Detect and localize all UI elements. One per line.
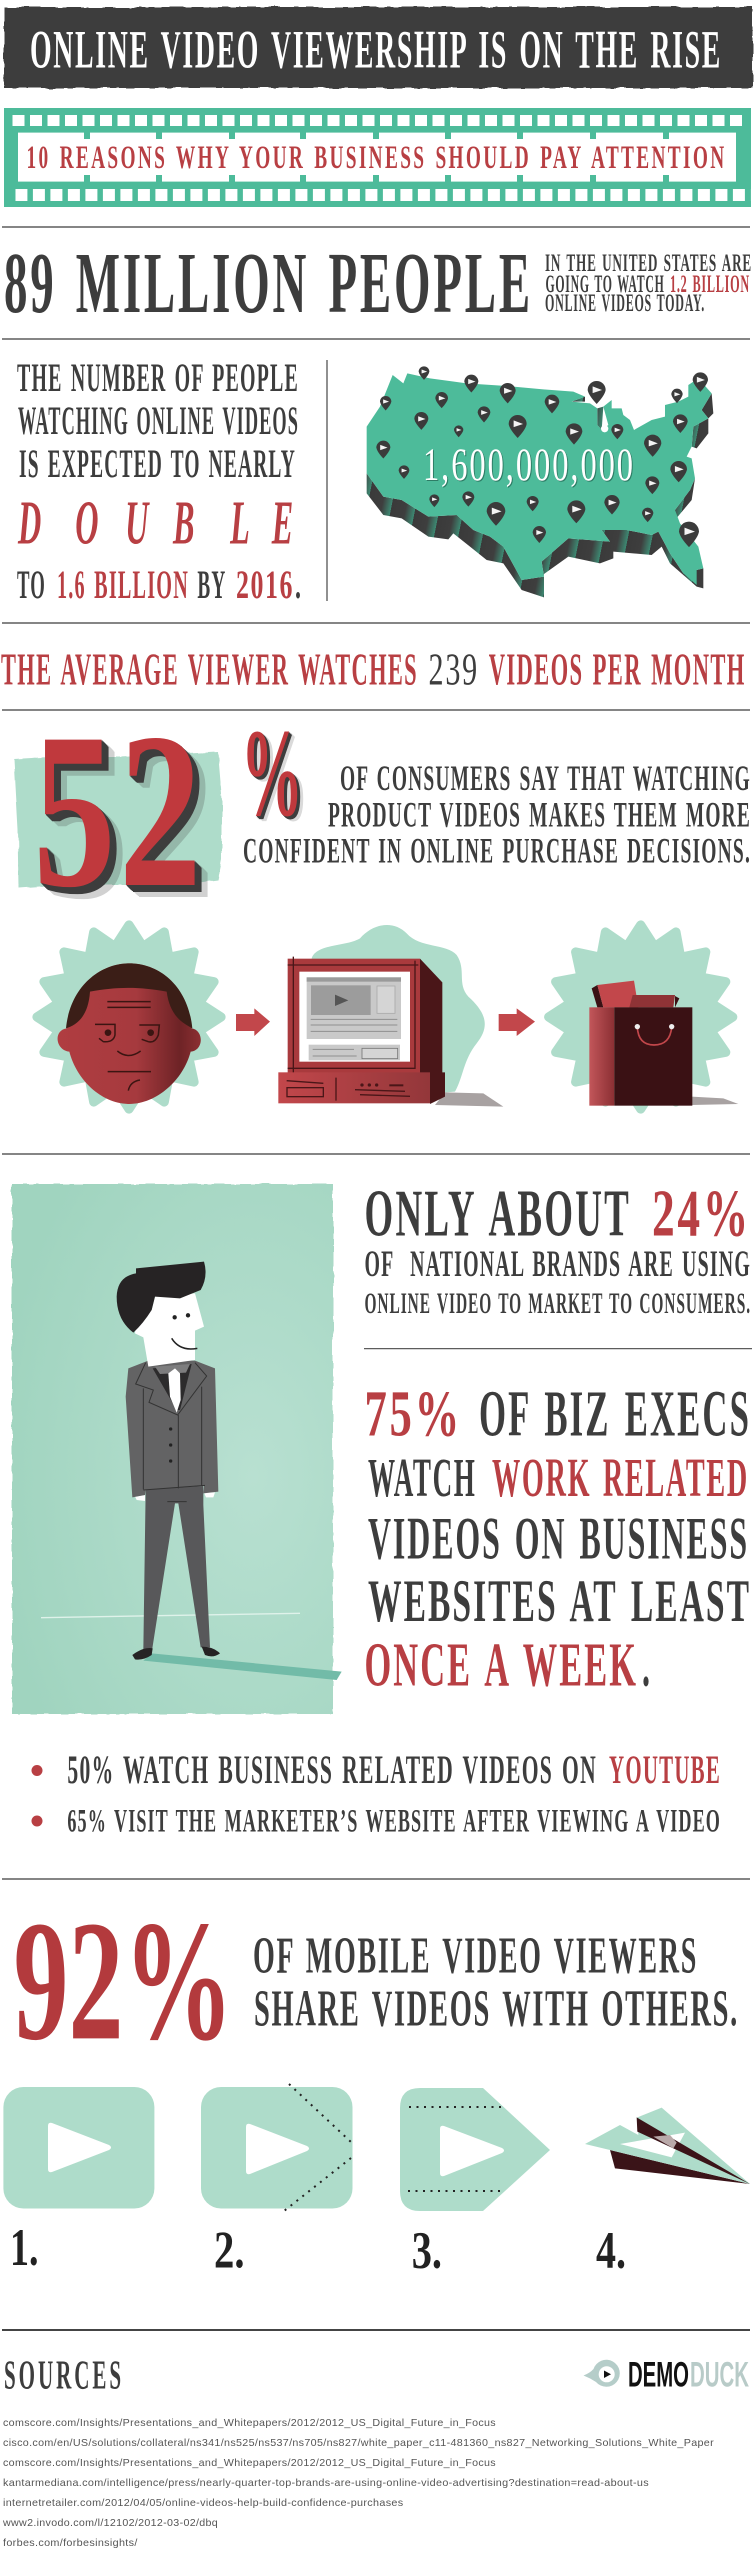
stat: 75 percent of biz execs: WATCH	[368, 1447, 476, 1508]
logo: DemoDuck	[584, 2356, 749, 2395]
source list: comscore.com/Insights/Presentations_and_Whitepapers/2012/2012_US_Digital_Future_in_Focus	[3, 2457, 496, 2469]
source list: internetretailer.com/2012/04/05/online-videos-help-build-confidence-purchases	[3, 2497, 404, 2509]
step 2: play button with fold lines: 2.	[214, 2222, 244, 2280]
arrow: computer to shopping bag	[499, 1008, 535, 1036]
panel: businessman illustration	[12, 1184, 342, 1714]
map figure label: 1,600,000,000	[423, 439, 635, 491]
stat: average viewer watches 239 videos: 239	[428, 644, 479, 694]
map of the USA with video pins	[367, 366, 713, 597]
stat: 92 percent of mobile viewers	[14, 1886, 739, 2076]
film strip subtitle banner	[4, 108, 751, 207]
source list: cisco.com/en/US/solutions/collateral/ns341/ns525/ns537/ns705/ns827/white_paper_c11-481360_ns827_Networking_Solutions_White_Paper	[3, 2437, 714, 2449]
icon: shopping bag	[549, 925, 738, 1109]
stat: 24 percent of national brands	[364, 1177, 751, 1320]
stat: 75 percent of biz execs: 75%	[364, 1377, 462, 1450]
text: IS EXPECTED TO NEARLY	[19, 441, 296, 486]
map top face	[367, 373, 712, 585]
source list: kantarmediana.com/intelligence/press/nearly-quarter-top-brands-are-using-online-video-advertising?destination=read-about-us	[3, 2477, 649, 2489]
step 4: paper airplane: 4.	[596, 2222, 626, 2280]
text block: viewers expected to double: 1.6 BILLION	[57, 562, 189, 607]
stat: 75 percent of biz execs	[364, 1377, 751, 1700]
mint backdrop behind 52	[14, 752, 222, 888]
icon: customer face	[37, 925, 221, 1109]
text block: viewers expected to double: THE NUMBER OF PEOPLE	[17, 355, 299, 400]
step 1: play button: 1.	[10, 2219, 38, 2277]
stat: 52 percent	[33, 688, 751, 934]
sources heading: SOURCES	[4, 2352, 124, 2398]
bullet list	[32, 1747, 721, 1840]
source list	[2, 2417, 714, 2549]
text block: viewers expected to double: TO	[17, 562, 46, 607]
icon: computer showing video page	[278, 925, 503, 1107]
text: WATCHING ONLINE VIDEOS	[18, 398, 299, 443]
text block: viewers expected to double	[17, 355, 301, 607]
arrow: face to computer	[236, 1008, 270, 1036]
text block: viewers expected to double: 2016	[236, 562, 294, 607]
stat: 75 percent of biz execs: .	[642, 1632, 650, 1700]
step 3: folded play button: 3.	[412, 2222, 442, 2280]
source list: www2.invodo.com/l/12102/2012-03-02/dbq	[2, 2517, 218, 2529]
text block: viewers expected to double: .	[295, 562, 301, 607]
map extruded side	[367, 473, 703, 597]
text block: viewers expected to double: DOUBLE	[17, 488, 293, 557]
text block: viewers expected to double: BY	[197, 562, 226, 607]
stat: 52 percent: %	[241, 705, 303, 843]
step 4: paper airplane	[585, 2108, 750, 2280]
step 2: play button with fold lines	[201, 2084, 352, 2280]
logo: DemoDuck: DEMO	[628, 2356, 689, 2395]
step 3: folded play button	[400, 2088, 550, 2280]
source list: comscore.com/Insights/Presentations_and_Whitepapers/2012/2012_US_Digital_Future_in_Focus	[3, 2417, 496, 2429]
stat: 92 percent of mobile viewers: 92%	[14, 1886, 234, 2076]
step 1: play button	[3, 2087, 154, 2277]
stat: 52 percent: 52	[33, 688, 205, 934]
map east coast sides	[572, 393, 713, 520]
source list: forbes.com/forbesinsights/	[3, 2537, 138, 2549]
